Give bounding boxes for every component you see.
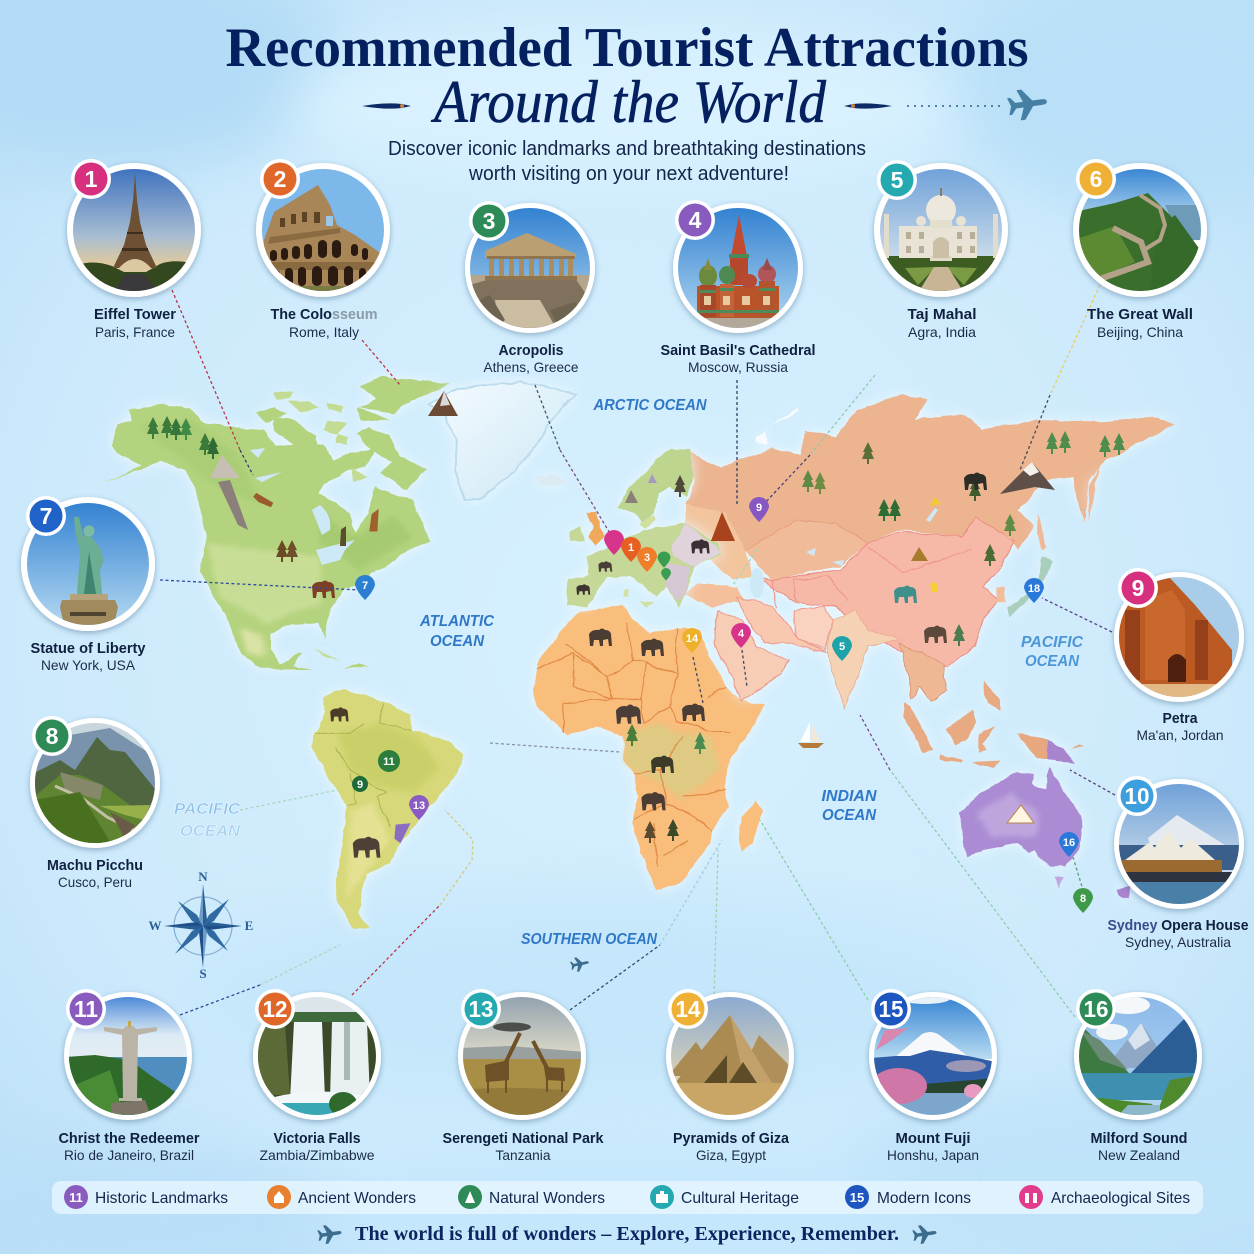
- legend item: ancient wonders: [267, 1185, 416, 1209]
- attraction 16: Milford Sound: Milford Sound: [1090, 1130, 1188, 1147]
- attraction 4: Saint Basil's Cathedral: 4: [689, 207, 702, 233]
- map icons: Greenland mountain: [428, 391, 458, 416]
- attraction 7: Statue of Liberty: 7: [40, 503, 52, 529]
- attraction 4: Saint Basil's Cathedral: Moscow, Russia: [688, 359, 788, 375]
- attraction 9: Petra: 9: [1132, 575, 1144, 601]
- map pins: 8: [1080, 893, 1086, 905]
- legend: [52, 1181, 1203, 1214]
- compass rose: N: [198, 869, 208, 884]
- ocean labels: ARCTIC OCEAN: [593, 397, 707, 414]
- map pins: [355, 497, 1093, 913]
- attraction 14: Pyramids of Giza: 14: [676, 996, 701, 1022]
- world map: [98, 285, 1175, 1017]
- title: [226, 17, 1049, 185]
- lakes and inland water: [250, 448, 938, 598]
- Korea: [996, 587, 1006, 602]
- attraction 9: Petra: [1114, 568, 1245, 743]
- attraction 4: Saint Basil's Cathedral: [660, 200, 816, 375]
- legend item: cultural heritage: Cultural Heritage: [681, 1190, 799, 1207]
- ocean labels: PACIFIC: [174, 801, 240, 818]
- ocean labels: OCEAN: [430, 633, 484, 650]
- legend item: historic landmarks: Historic Landmarks: [95, 1190, 228, 1207]
- map icons: South America: 11: [383, 756, 395, 768]
- attraction 8: Machu Picchu: [30, 716, 160, 890]
- continent: South America: [312, 688, 463, 928]
- sailboat: [798, 722, 824, 748]
- map pins: 16: [1063, 837, 1075, 849]
- India: [826, 610, 899, 708]
- map pins: 4: [738, 628, 745, 640]
- attraction 4: Saint Basil's Cathedral: Saint Basil's Cathedral: [660, 342, 816, 359]
- attraction 11: Christ the Redeemer: Christ the Redeemer: [58, 1130, 200, 1147]
- attraction 15: Mount Fuji: 15: [878, 996, 904, 1022]
- ocean labels: PACIFIC: [1021, 634, 1083, 651]
- compass rose: S: [199, 966, 207, 981]
- legend item: modern icons: [845, 1185, 971, 1209]
- map pins: 14: [686, 633, 699, 645]
- attraction 15: Mount Fuji: Honshu, Japan: [887, 1147, 979, 1163]
- map icons: Africa animals: [589, 628, 706, 843]
- China, Mongolia and Central Asia: [757, 518, 1014, 667]
- attraction 8: Machu Picchu: Cusco, Peru: [58, 874, 132, 890]
- attraction 6: The Great Wall: The Great Wall: [1087, 306, 1193, 323]
- attraction 12: Victoria Falls: Zambia/Zimbabwe: [260, 1147, 375, 1163]
- Anatolia and Middle East: [684, 583, 745, 607]
- attraction 2: The Colosseum: Rome, Italy: [289, 324, 359, 340]
- connector lines: [160, 285, 1115, 1017]
- legend item: modern icons: Modern Icons: [877, 1190, 971, 1207]
- legend item: ancient wonders: Ancient Wonders: [298, 1190, 416, 1207]
- footer tagline: The world is full of wonders – Explore, Experience, Remember.: [355, 1223, 899, 1245]
- map pins: 9: [756, 502, 762, 514]
- attraction 13: Serengeti National Park: Tanzania: [496, 1147, 551, 1163]
- continent: North America: [98, 377, 450, 670]
- map icon: Uluru tent in Australia: [1007, 805, 1034, 823]
- title: worth visiting on your next adventure!: [468, 163, 789, 185]
- attraction 15: Mount Fuji: [869, 989, 997, 1163]
- attraction 10: Sydney Opera House: [1108, 776, 1248, 950]
- ocean labels: OCEAN: [1025, 653, 1079, 670]
- attraction 1: Eiffel Tower: Paris, France: [95, 324, 175, 340]
- attraction 2: The Colosseum: The Colosseum: [270, 306, 378, 323]
- small plane on the ocean: [569, 955, 590, 973]
- heading: recommended tourist attractions: Recommended Tourist Attractions: [226, 17, 1028, 79]
- attraction 11: Christ the Redeemer: 11: [74, 996, 98, 1022]
- attraction 6: The Great Wall: 6: [1090, 166, 1102, 192]
- legend item: modern icons: 15: [850, 1190, 864, 1205]
- ocean labels: OCEAN: [822, 807, 876, 824]
- attraction 1: Eiffel Tower: 1: [85, 166, 98, 192]
- attraction 3: Acropolis: [465, 201, 595, 375]
- attraction 8: Machu Picchu: Machu Picchu: [47, 857, 143, 874]
- attraction 11: Christ the Redeemer: [58, 989, 200, 1163]
- compass rose: E: [245, 918, 253, 933]
- legend item: cultural heritage: [650, 1185, 799, 1209]
- attraction 12: Victoria Falls: [253, 989, 381, 1163]
- legend item: natural wonders: [458, 1185, 605, 1209]
- attraction 1: Eiffel Tower: [67, 159, 201, 340]
- attraction 5: Taj Mahal: Taj Mahal: [908, 306, 976, 323]
- map pins: 3: [644, 552, 650, 564]
- ocean labels: OCEAN: [180, 823, 240, 840]
- legend item: historic landmarks: [64, 1185, 228, 1209]
- legend item: archaeological sites: [1019, 1185, 1190, 1209]
- attraction 13: Serengeti National Park: Serengeti National Park: [442, 1130, 604, 1147]
- attraction 5: Taj Mahal: [874, 160, 1008, 340]
- continent: Europe: [536, 408, 799, 607]
- attraction 3: Acropolis: Athens, Greece: [484, 359, 579, 375]
- attraction 12: Victoria Falls: Victoria Falls: [274, 1130, 360, 1147]
- ocean labels: [174, 397, 1083, 948]
- legend item: archaeological sites: Archaeological Sites: [1051, 1190, 1190, 1207]
- legend item: historic landmarks: 11: [69, 1190, 83, 1205]
- attraction 14: Pyramids of Giza: Giza, Egypt: [696, 1147, 766, 1163]
- ocean labels: SOUTHERN OCEAN: [521, 931, 657, 948]
- attraction 16: Milford Sound: 16: [1084, 996, 1108, 1022]
- attraction 9: Petra: Petra: [1162, 710, 1198, 727]
- attraction 14: Pyramids of Giza: Pyramids of Giza: [673, 1130, 790, 1147]
- attraction 16: Milford Sound: New Zealand: [1098, 1147, 1180, 1163]
- map icons: North America trees and mountains: [147, 416, 377, 598]
- map icons: South America: [330, 707, 408, 858]
- continent: Australia and Oceania: [903, 680, 1132, 898]
- subtitle: Discover iconic landmarks and breathtaking destinations: [388, 138, 866, 160]
- attraction 13: Serengeti National Park: 13: [468, 996, 494, 1022]
- attraction 8: Machu Picchu: 8: [46, 723, 59, 749]
- attraction 15: Mount Fuji: Mount Fuji: [896, 1130, 970, 1147]
- attraction 5: Taj Mahal: Agra, India: [908, 324, 976, 340]
- heading: around the world: Around the World: [430, 69, 827, 135]
- continent: Russia and northern Asia: [684, 395, 1175, 708]
- attraction 6: The Great Wall: [1073, 159, 1207, 340]
- islands: Japan and Sakhalin: [1008, 467, 1099, 617]
- attraction 10: Sydney Opera House: Sydney Opera House: [1108, 917, 1248, 934]
- attraction 16: Milford Sound: [1074, 989, 1202, 1163]
- continent: Greenland and Iceland: [428, 382, 575, 500]
- decorative pens and plane: [362, 86, 1049, 122]
- attraction 7: Statue of Liberty: New York, USA: [41, 657, 136, 673]
- map pins: 13: [413, 800, 425, 812]
- ocean labels: ATLANTIC: [419, 613, 494, 630]
- attraction 3: Acropolis: 3: [483, 208, 495, 234]
- attraction 1: Eiffel Tower: Eiffel Tower: [94, 306, 176, 323]
- compass rose: [148, 869, 253, 981]
- attraction 5: Taj Mahal: 5: [891, 167, 904, 193]
- attraction 10: Sydney Opera House: 10: [1124, 783, 1150, 809]
- map pins: 5: [839, 641, 845, 653]
- attraction 3: Acropolis: Acropolis: [498, 342, 564, 359]
- attraction 2: The Colosseum: 2: [274, 166, 286, 192]
- ocean labels: INDIAN: [822, 788, 877, 805]
- map icons: South America: 9: [357, 779, 363, 791]
- compass rose: W: [148, 918, 162, 933]
- attraction 10: Sydney Opera House: Sydney, Australia: [1125, 934, 1231, 950]
- map pins: 18: [1028, 583, 1040, 595]
- map icons: Eurasia landmarks and trees: [576, 431, 1125, 646]
- attraction 12: Victoria Falls: 12: [262, 996, 288, 1022]
- map pins: 1: [628, 542, 634, 554]
- legend item: natural wonders: Natural Wonders: [489, 1190, 605, 1207]
- attraction 7: Statue of Liberty: Statue of Liberty: [30, 640, 146, 657]
- attraction 2: The Colosseum: [256, 159, 390, 340]
- attraction 14: Pyramids of Giza: [666, 989, 794, 1163]
- map pins: 7: [362, 580, 368, 592]
- attraction 9: Petra: Ma'an, Jordan: [1136, 727, 1224, 743]
- attraction 7: Statue of Liberty: [21, 496, 155, 673]
- attraction 11: Christ the Redeemer: Rio de Janeiro, Brazil: [64, 1147, 194, 1163]
- attraction 6: The Great Wall: Beijing, China: [1097, 324, 1183, 340]
- Southeast Asia: [899, 643, 947, 702]
- attraction 13: Serengeti National Park: [442, 989, 604, 1163]
- continent: Africa: [533, 605, 765, 890]
